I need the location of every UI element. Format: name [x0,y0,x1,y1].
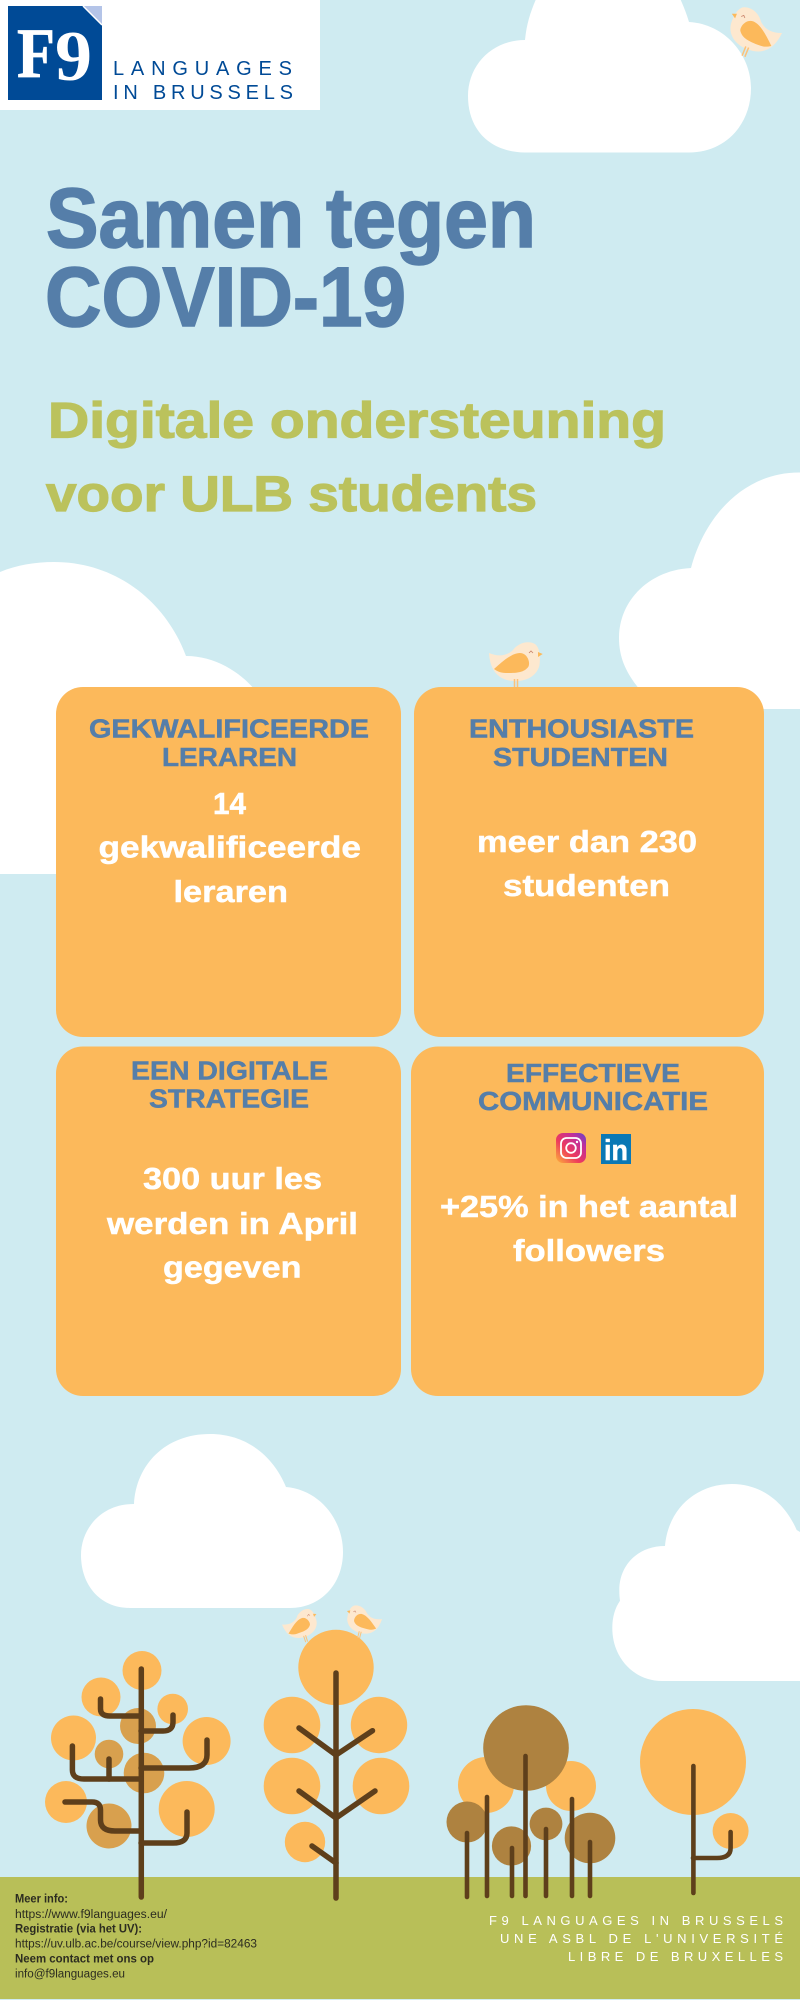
tree 4: single round tree [640,1709,749,1893]
tree 1: branching tree [45,1651,231,1897]
panel: gekwalificeerde leraren [56,687,401,1037]
tree 2: symmetric tree [264,1630,409,1898]
ground [0,1877,800,1999]
panel: een digitale strategie: EEN DIGITALE [131,1056,328,1086]
subtitle: voor ULB students [46,466,537,522]
cloud: bottom right [612,1484,800,1681]
panel: effectieve communicatie [411,1046,764,1396]
panel: gekwalificeerde leraren: gekwalificeerde [98,830,361,864]
icon: bird on card [489,642,543,689]
panel: gekwalificeerde leraren: GEKWALIFICEERDE [89,714,369,744]
title [45,171,536,344]
organisation text: UNE ASBL DE L'UNIVERSITÉ [500,1931,783,1946]
contact info text: info@f9languages.eu [15,1969,125,1981]
icon: instagram [556,1133,586,1163]
contact info text: Neem contact met ons op [15,1954,154,1966]
contact info text: Meer info: [15,1894,68,1906]
panel: een digitale strategie: gegeven [163,1250,302,1284]
panel: gekwalificeerde leraren: LERAREN [162,742,297,772]
tree 3: cluster of thin trees [446,1705,615,1897]
cloud: middle left [0,562,255,874]
icon: bird on top cloud [719,3,786,66]
panel: een digitale strategie: STRATEGIE [149,1084,309,1114]
logo: F9 Languages in Brussels: 9 [55,18,92,96]
contact info text: Registratie (via het UV): [15,1924,142,1936]
logo: F9 Languages in Brussels: LANGUAGES [113,58,292,80]
organisation text [489,1913,783,1964]
contact info text: https://www.f9languages.eu/ [15,1909,168,1921]
icon: bird left on tree [280,1607,324,1647]
panel: effectieve communicatie: followers [513,1233,665,1268]
icon: bird right on tree [341,1603,384,1642]
logo: F9 Languages in Brussels [0,0,320,110]
panel: enthousiaste studenten: meer dan 230 [477,824,697,859]
cloud: top right [468,0,751,152]
organisation text: F9 LANGUAGES IN BRUSSELS [489,1913,783,1928]
organisation text: LIBRE DE BRUXELLES [568,1949,783,1964]
panel: effectieve communicatie: EFFECTIEVE [506,1058,680,1088]
logo: F9 Languages in Brussels: F [17,15,55,93]
panel: effectieve communicatie: +25% in het aantal [440,1189,738,1224]
cloud: middle right [619,472,800,709]
logo: F9 Languages in Brussels: IN BRUSSELS [113,82,293,104]
subtitle [46,392,666,522]
panel: enthousiaste studenten: ENTHOUSIASTE [469,714,694,744]
panel: enthousiaste studenten: studenten [503,868,670,903]
icon: linkedin: in [604,1135,628,1167]
cloud: bottom left [81,1434,343,1608]
title: Samen tegen [46,171,536,265]
panel: effectieve communicatie: COMMUNICATIE [478,1086,708,1116]
title: COVID-19 [45,250,406,344]
subtitle: Digitale ondersteuning [48,392,666,448]
panel: gekwalificeerde leraren: leraren [174,874,288,909]
panel: een digitale strategie [56,1046,401,1396]
panel: enthousiaste studenten: STUDENTEN [493,742,668,772]
contact info text [15,1894,257,1981]
panel: een digitale strategie: werden in April [106,1206,358,1241]
contact info text: https://uv.ulb.ac.be/course/view.php?id=82463 [15,1939,257,1951]
panel: gekwalificeerde leraren: 14 [213,786,247,821]
panel: een digitale strategie: 300 uur les [143,1161,322,1196]
panel: enthousiaste studenten [414,687,764,1037]
